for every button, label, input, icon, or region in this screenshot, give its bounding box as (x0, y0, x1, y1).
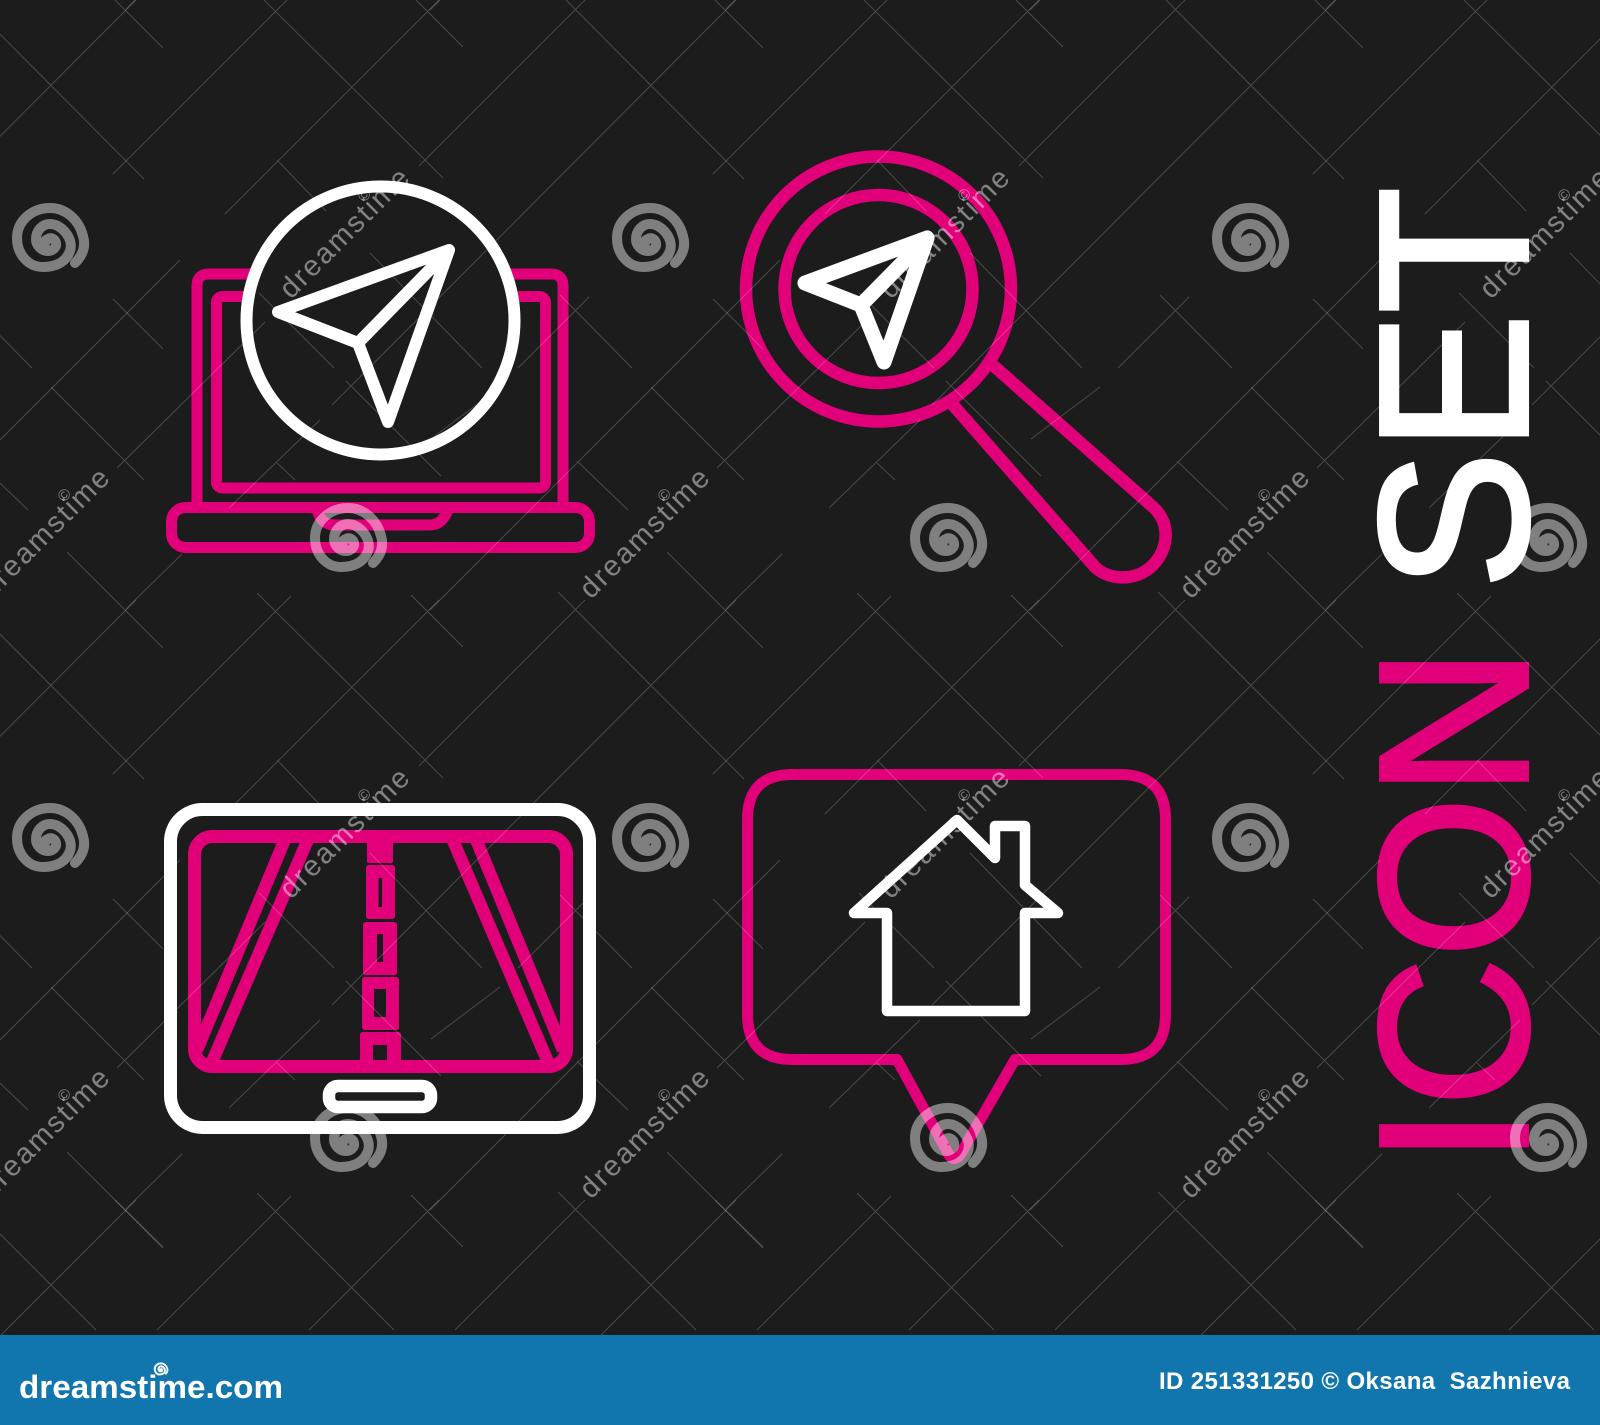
watermark text: dreamstime (1173, 1062, 1316, 1205)
watermark text: dreamstime (1173, 462, 1316, 605)
icon: tablet with road (170, 810, 590, 1128)
word: ICON: ICON (1336, 647, 1573, 1164)
watermark text: © (955, 185, 975, 206)
tablet button (329, 1086, 431, 1107)
watermark text: © (655, 1085, 675, 1106)
watermark text: © (355, 185, 375, 206)
tablet frame (170, 810, 590, 1128)
magnifier lens and handle (746, 156, 1166, 577)
watermark text: dreamstime (273, 762, 416, 905)
watermark text: dreamstime (573, 1062, 716, 1205)
footer bar (0, 1335, 1600, 1425)
watermark text: dreamstime (273, 162, 416, 305)
watermark text (0, 159, 1600, 1205)
watermark text: © (355, 785, 375, 806)
white circle with arrow (246, 186, 514, 454)
watermark text: © (1555, 185, 1575, 206)
watermark text: dreamstime (873, 762, 1016, 905)
footer logo: dreamstime.com (19, 1369, 283, 1405)
watermark swirls (17, 208, 1582, 1167)
watermark text: © (955, 785, 975, 806)
icon: laptop with navigation arrow (172, 186, 590, 548)
laptop body (172, 274, 590, 548)
road screen (194, 836, 566, 1066)
bubble (748, 774, 1166, 1159)
watermark text: © (1255, 485, 1275, 506)
watermark text: © (1555, 785, 1575, 806)
watermark text: © (55, 1085, 75, 1106)
watermark text: © (655, 485, 675, 506)
watermark text: dreamstime (573, 462, 716, 605)
house (854, 820, 1058, 1011)
image id and credit: ID 251331250 © Oksana Sazhnieva (1159, 1368, 1571, 1395)
word: SET: SET (1336, 187, 1573, 589)
vertical title: ICON SET (1336, 187, 1573, 1164)
icon: speech-bubble pin with house (748, 774, 1166, 1159)
watermark text: © (1255, 1085, 1275, 1106)
watermark text: © (55, 485, 75, 506)
icon: magnifying glass with navigation arrow (746, 156, 1166, 577)
white arrow (805, 238, 927, 362)
watermark text: dreamstime (873, 162, 1016, 305)
